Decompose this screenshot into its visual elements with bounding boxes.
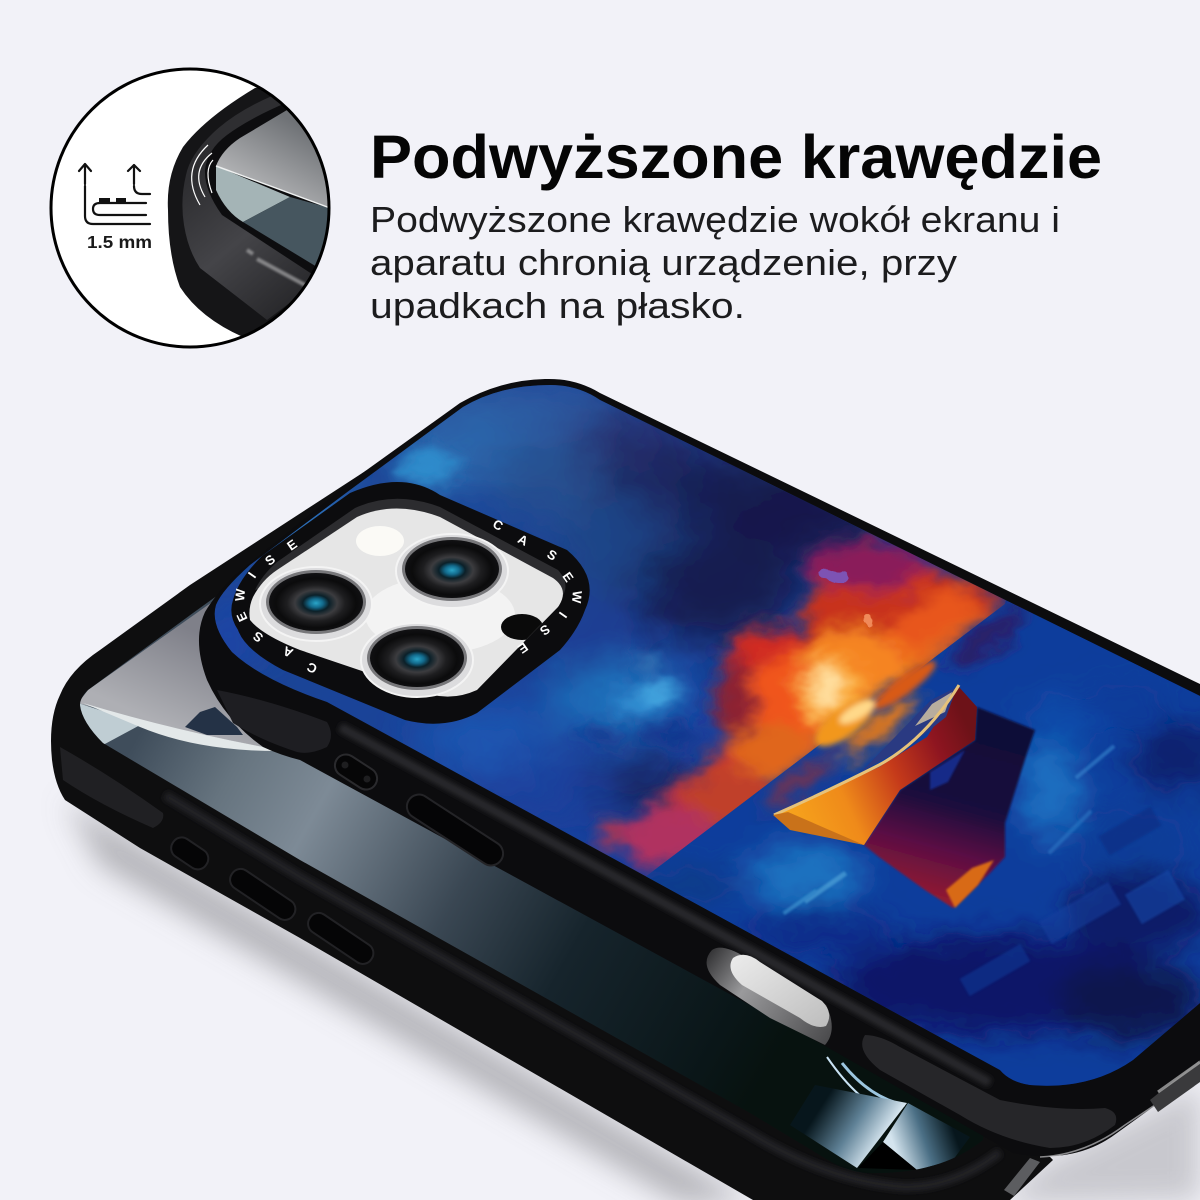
lens left — [260, 567, 372, 641]
boat rim — [774, 685, 959, 815]
back phone screen — [80, 597, 970, 1170]
painted water — [646, 602, 1200, 1086]
CASEWISE lettering on ring: I — [245, 569, 259, 581]
icon label: 1.5 mm: 1.5 mm — [87, 232, 152, 252]
soft window highlight — [365, 577, 515, 653]
painted sky — [207, 380, 1010, 878]
artwork: painted boat at sunset — [190, 370, 1200, 1120]
bumper bottom edge glint — [1040, 1075, 1200, 1157]
orange band along the horizon — [620, 604, 1005, 878]
boat bow tip — [773, 812, 864, 845]
CASEWISE lettering on ring: E — [233, 610, 251, 624]
boat interior — [861, 687, 957, 772]
CASEWISE lettering on ring: E — [284, 536, 300, 554]
CASEWISE lettering on ring: S — [544, 546, 560, 564]
CASEWISE lettering on ring: S — [262, 551, 278, 569]
boat hull — [774, 687, 977, 845]
back phone — [51, 470, 1053, 1200]
body text — [370, 199, 1060, 326]
heading: Podwyższone krawędzie — [370, 123, 1102, 191]
lens top right — [396, 534, 508, 608]
bumper corner highlight — [217, 690, 331, 753]
CASEWISE lettering on ring: E — [559, 569, 577, 585]
body text: upadkach na płasko. — [370, 285, 745, 326]
bumper upper band sheen — [340, 727, 990, 1083]
screen reflection — [216, 110, 330, 208]
back phone body — [51, 470, 1053, 1200]
CASEWISE lettering on ring: W — [569, 590, 585, 604]
water brush blocks — [782, 744, 1185, 996]
camera module — [231, 482, 590, 724]
CASEWISE lettering on ring: I — [556, 609, 570, 621]
zoom circle: raised edge detail — [51, 69, 340, 347]
CASEWISE lettering on ring: A — [515, 531, 531, 549]
side button: volume down — [304, 909, 377, 968]
CASEWISE lettering on ring: W — [232, 588, 248, 602]
side button: volume up — [226, 865, 299, 924]
body text: aparatu chronią urządzenie, przy — [370, 242, 957, 283]
CASEWISE lettering on ring — [232, 516, 585, 677]
white curved lines — [192, 145, 213, 205]
soft shadow under phones — [66, 800, 1200, 1200]
camera ring — [231, 482, 590, 724]
CASEWISE lettering on ring: A — [280, 643, 295, 661]
boat blue patch — [930, 750, 965, 790]
back phone bumper highlight — [60, 747, 163, 828]
crimson and red upper sky — [800, 535, 1010, 690]
charging port — [707, 948, 832, 1045]
camera inner bevel — [255, 499, 566, 600]
flash — [356, 526, 404, 556]
right side port — [1150, 1060, 1200, 1112]
CASEWISE lettering on ring: E — [515, 639, 531, 657]
side button: small — [167, 834, 212, 873]
CASEWISE lettering on ring: S — [537, 621, 553, 639]
camera window — [249, 508, 563, 697]
side button long on front phone — [402, 790, 508, 870]
icon: raised edge diagram — [79, 164, 150, 224]
CASEWISE lettering on ring: S — [250, 628, 266, 646]
side button small on front phone — [331, 750, 381, 794]
back phone lower band sheen — [165, 795, 1000, 1187]
screen wallpaper light curves — [826, 1056, 860, 1094]
bottom port of back phone — [1004, 1158, 1040, 1196]
phone corner close-up — [168, 88, 328, 336]
boat reflection — [864, 707, 1035, 908]
CASEWISE lettering on ring: C — [490, 516, 506, 534]
lens bottom — [361, 623, 473, 697]
front phone — [190, 370, 1200, 1157]
wallpaper wedges — [790, 1085, 907, 1168]
front phone bumper — [199, 379, 1200, 1156]
bottom right bumper highlight — [862, 1035, 1116, 1148]
sensor — [501, 614, 543, 640]
CASEWISE lettering on ring: C — [304, 659, 319, 677]
body text: Podwyższone krawędzie wokół ekranu i — [370, 199, 1060, 240]
golden horizon reflection — [812, 658, 940, 751]
